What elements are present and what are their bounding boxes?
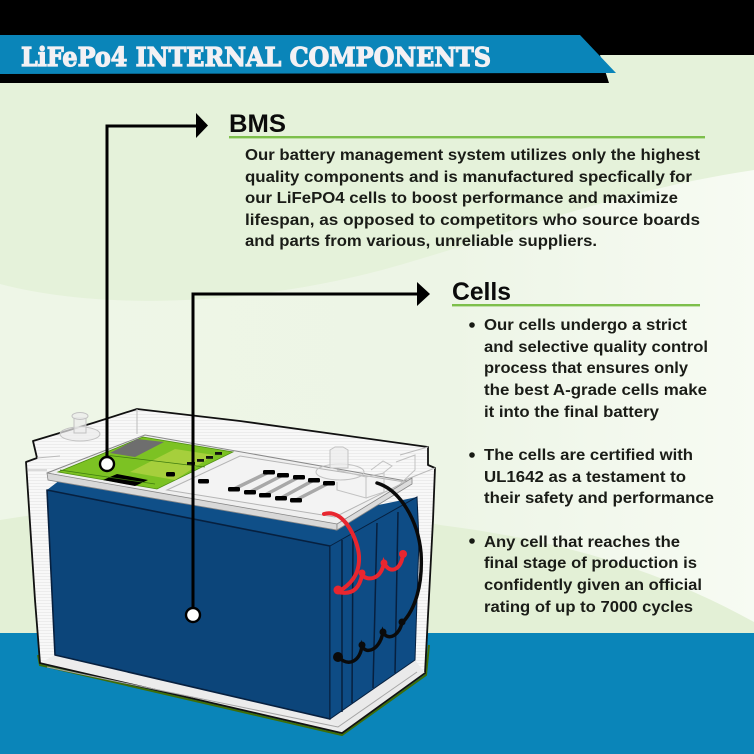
BMS text block bbox=[245, 147, 700, 250]
black wires bbox=[333, 483, 421, 662]
red wires bbox=[324, 513, 407, 594]
Cells bullet list: rating of up to 7000 cycles bbox=[484, 599, 693, 616]
Cells bullet list: the best A-grade cells make bbox=[484, 382, 707, 399]
Cells bullet list: UL1642 as a testament to bbox=[484, 469, 686, 486]
Cells bullet list: it into the final battery bbox=[484, 404, 659, 421]
BMS circuit board bbox=[58, 437, 233, 489]
Cells bullet list bbox=[469, 317, 714, 616]
BMS heading: BMS bbox=[229, 110, 286, 138]
BMS text block: our LiFePO4 cells to boost performance and maximize bbox=[245, 190, 678, 207]
lid plate bbox=[47, 435, 412, 530]
BMS text block: quality components and is manufactured specfically for bbox=[245, 169, 692, 186]
arrow: BMS callout bbox=[100, 113, 208, 471]
contact pads and strips bbox=[198, 470, 335, 502]
Cells heading: Cells bbox=[452, 278, 511, 306]
Cells bullet list: process that ensures only bbox=[484, 360, 688, 377]
white panel bbox=[167, 456, 405, 517]
arrow: Cells callout bbox=[186, 282, 430, 622]
Cells bullet list: their safety and performance bbox=[484, 490, 714, 507]
Cells bullet list: The cells are certified with bbox=[484, 447, 693, 464]
terminals bbox=[60, 412, 415, 498]
Cells bullet list: and selective quality control bbox=[484, 339, 708, 356]
battery illustration bbox=[26, 409, 435, 735]
Cells bullet list: final stage of production is bbox=[484, 555, 697, 572]
header banner bbox=[0, 0, 754, 83]
Cells bullet list: Any cell that reaches the bbox=[484, 534, 680, 551]
Cells bullet list: confidently given an official bbox=[484, 577, 702, 594]
battery case bbox=[26, 409, 435, 735]
BMS text block: lifespan, as opposed to competitors who source boards bbox=[245, 212, 700, 229]
BMS text block: and parts from various, unreliable suppliers. bbox=[245, 233, 597, 250]
battery cells bbox=[47, 480, 419, 719]
banner title: LiFePo4 INTERNAL COMPONENTS bbox=[21, 43, 491, 73]
BMS text block: Our battery management system utilizes only the highest bbox=[245, 147, 700, 164]
Cells bullet list: Our cells undergo a strict bbox=[484, 317, 687, 334]
